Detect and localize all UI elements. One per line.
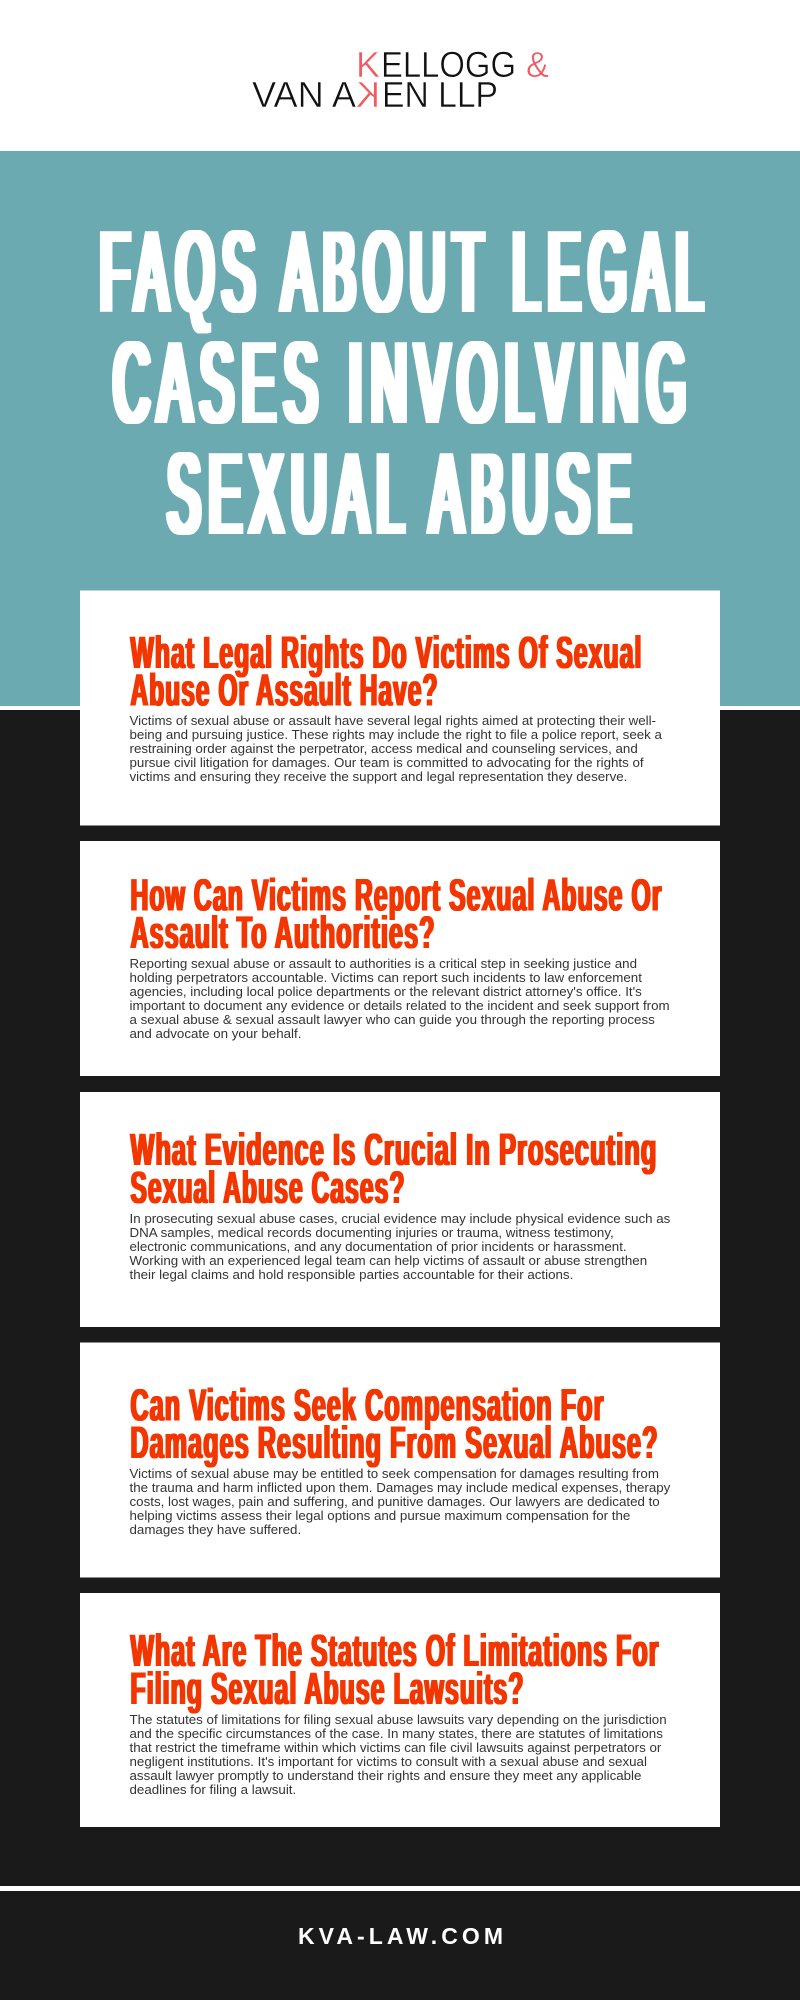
text: reporting: important to document any evidence or details related to the incident and seek support from — [130, 998, 670, 1013]
text: compensation: damages they have suffered. — [130, 1522, 301, 1537]
text: reporting: and advocate on your behalf. — [130, 1026, 301, 1041]
text: legal rights: restraining order against the perpetrator, access medical and counseling services, and — [130, 741, 638, 756]
footer url: KVA-LAW.COM — [298, 1923, 503, 1949]
text: statutes: negligent institutions. It's important for victims to consult with a sexual abuse and sexual — [130, 1754, 647, 1769]
text: compensation — [130, 1466, 671, 1537]
text: statutes: deadlines for filing a lawsuit. — [130, 1782, 296, 1797]
logo: Kellogg & Van Aken LLP: K — [356, 74, 380, 115]
text: reporting: agencies, including local police departments or the relevant district attorney's office. It's — [130, 984, 642, 999]
heading: reporting: Assault To Authorities? — [130, 907, 436, 958]
text: evidence — [130, 1211, 671, 1282]
title — [100, 209, 711, 558]
text: evidence: DNA samples, medical records documenting injuries or trauma, witness testimony, — [130, 1225, 614, 1240]
text: legal rights — [130, 713, 663, 784]
text: compensation: helping victims assess their legal options and pursue maximum compensation for the — [130, 1508, 630, 1523]
panel: evidence — [80, 1092, 720, 1327]
text: statutes: that restrict the timeframe within which victims can file civil lawsuits against perpetrators or — [130, 1740, 662, 1755]
text: evidence: Working with an experienced legal team can help victims of assault or abuse strengthen — [130, 1253, 647, 1268]
panel: legal rights — [80, 590, 720, 826]
heading: reporting — [130, 870, 662, 958]
logo: Kellogg & Van Aken LLP: VAN A — [252, 74, 356, 115]
text: legal rights: Victims of sexual abuse or assault have several legal rights aimed at protecting their well- — [130, 713, 656, 728]
heading: legal rights — [130, 627, 642, 716]
panel: compensation — [80, 1342, 720, 1578]
text: evidence: electronic communications, and any documentation of prior incidents or harassment. — [130, 1239, 627, 1254]
heading: legal rights: Abuse Or Assault Have? — [130, 664, 438, 716]
heading: statutes — [130, 1625, 660, 1714]
logo: Kellogg & Van Aken LLP: & — [526, 44, 549, 85]
header band — [0, 151, 800, 706]
heading: compensation — [130, 1380, 658, 1468]
text: reporting: a sexual abuse & sexual assault lawyer who can guide you through the reporting process — [130, 1012, 655, 1027]
text: compensation: the trauma and harm inflicted upon them. Damages may include medical expenses, therapy — [130, 1480, 671, 1495]
heading: evidence: Sexual Abuse Cases? — [130, 1162, 406, 1213]
text: statutes — [130, 1712, 667, 1797]
text: evidence: In prosecuting sexual abuse cases, crucial evidence may include physical evidence such as — [130, 1211, 671, 1226]
text: evidence: their legal claims and hold responsible parties accountable for their actions. — [130, 1267, 573, 1282]
text: legal rights: being and pursuing justice. These rights may include the right to file a police report, seek a — [130, 727, 663, 742]
text: reporting — [130, 956, 670, 1041]
text: statutes: assault lawyer promptly to understand their rights and ensure they meet any applicable — [130, 1768, 641, 1783]
heading: evidence — [130, 1124, 658, 1213]
logo: Kellogg & Van Aken LLP: K — [356, 44, 380, 85]
text: statutes: and the specific circumstances of the case. In many states, there are statutes of limitations — [130, 1726, 663, 1741]
logo: Kellogg & Van Aken LLP — [252, 44, 549, 115]
text: statutes: The statutes of limitations for filing sexual abuse lawsuits vary depending on the jurisdiction — [130, 1712, 667, 1727]
text: legal rights: pursue civil litigation for damages. Our team is committed to advocating for the rights of — [130, 755, 644, 770]
panel: statutes — [80, 1593, 720, 1827]
text: compensation: costs, lost wages, pain and suffering, and punitive damages. Our lawyers are dedicated to — [130, 1494, 660, 1509]
text: compensation: Victims of sexual abuse may be entitled to seek compensation for damages resulting from — [130, 1466, 659, 1481]
logo: Kellogg & Van Aken LLP: EN LLP — [382, 74, 498, 115]
text: legal rights: victims and ensuring they receive the support and legal representation they deserve. — [130, 769, 627, 784]
text: reporting: Reporting sexual abuse or assault to authorities is a critical step in seeking justice and — [130, 956, 637, 971]
panel: reporting — [80, 841, 720, 1076]
text: reporting: holding perpetrators accountable. Victims can report such incidents to law enforcement — [130, 970, 642, 985]
logo: Kellogg & Van Aken LLP: ELLOGG — [381, 44, 516, 85]
